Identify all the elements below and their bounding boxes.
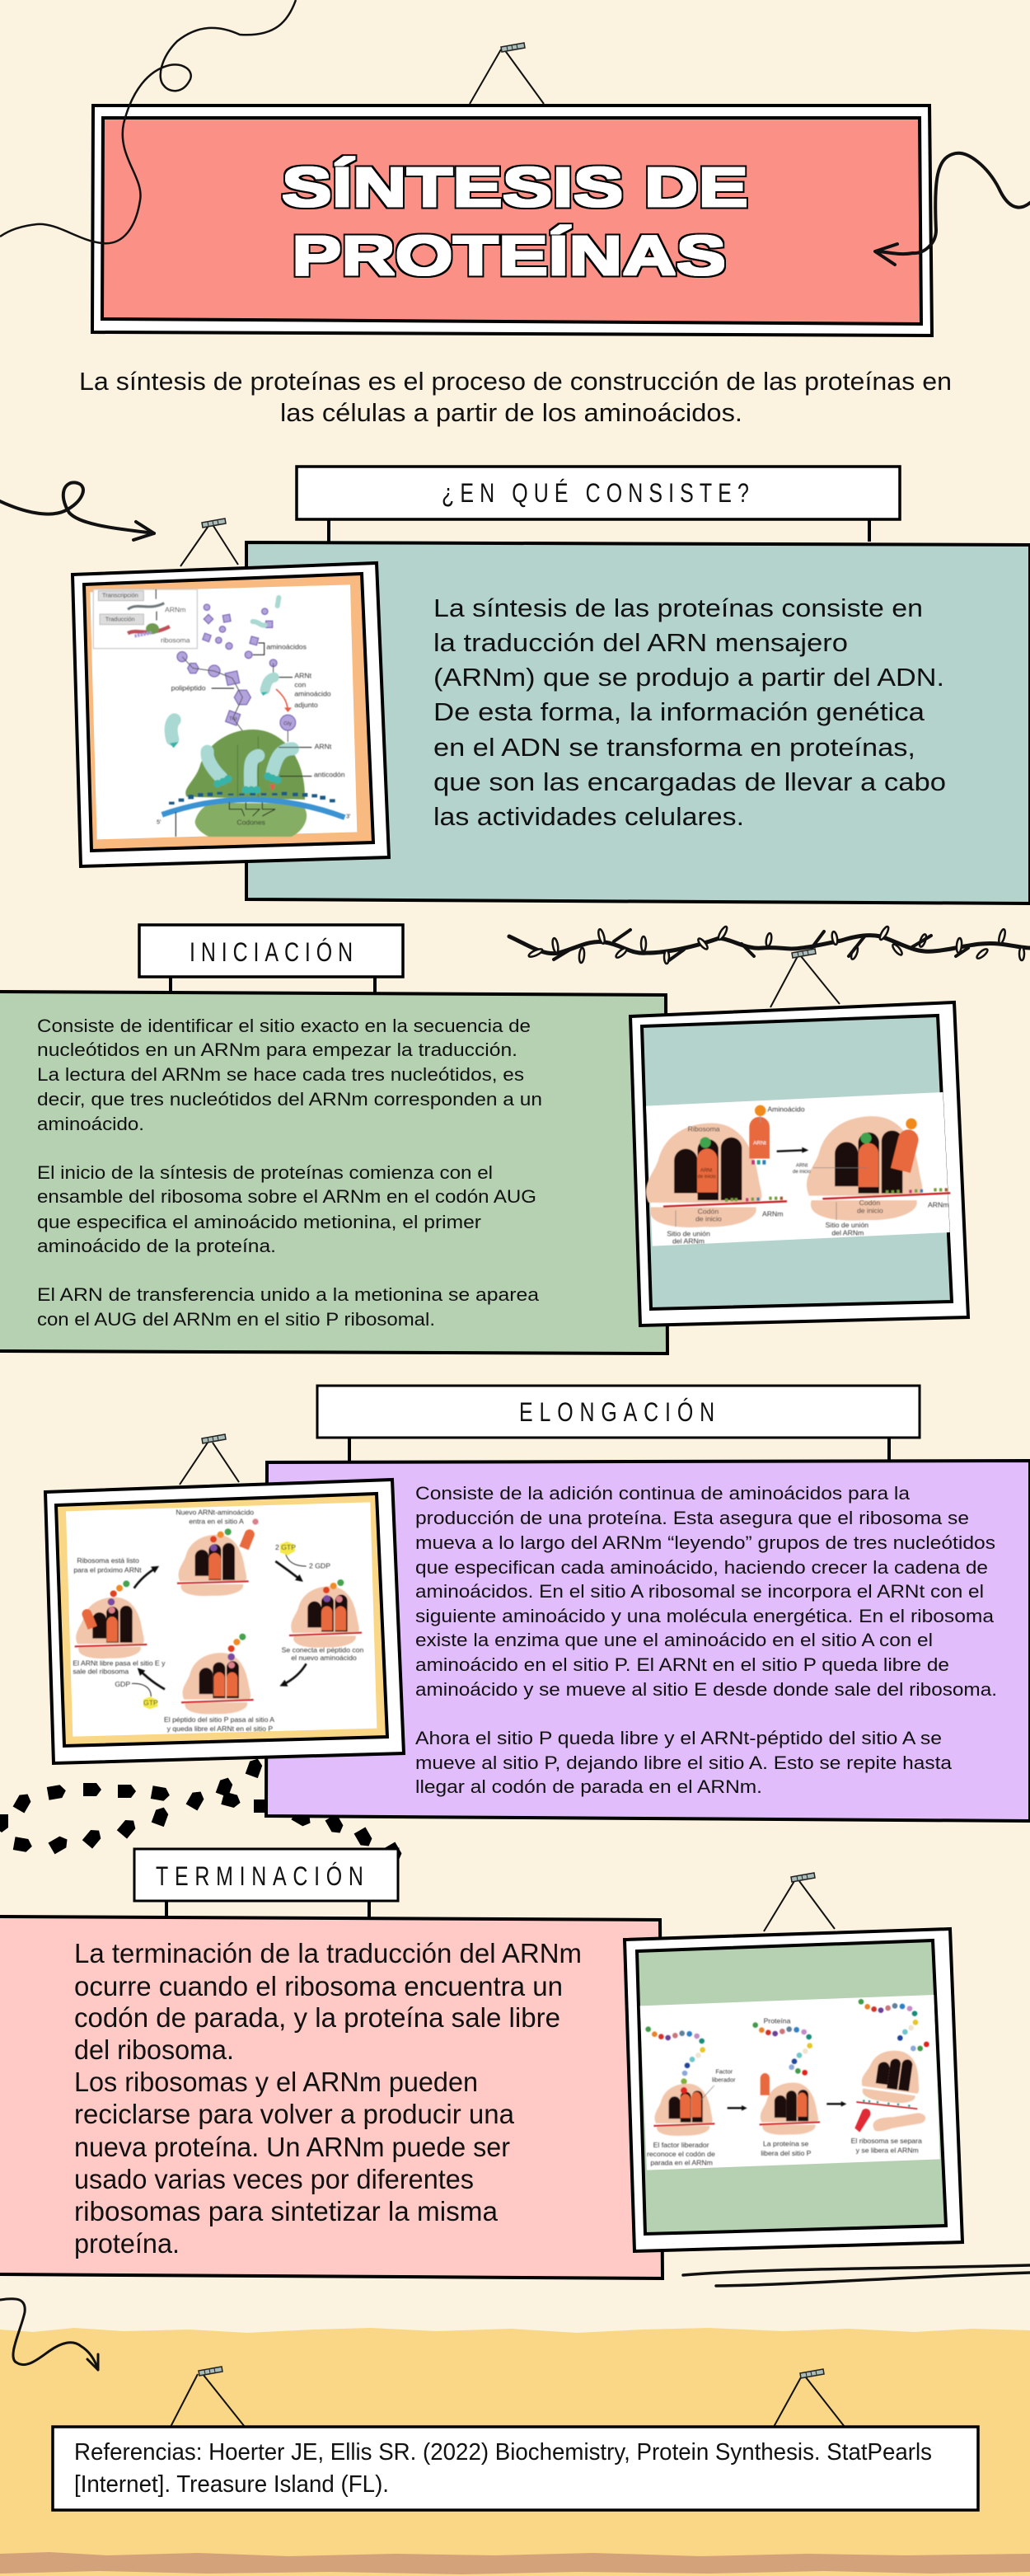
picture: termination diagram <box>625 1929 962 2251</box>
picture: ribosome translation diagram: adjunto <box>294 701 318 709</box>
text block: iniciacion <box>37 1016 542 1330</box>
picture: initiation diagram: ARNm <box>762 1209 783 1218</box>
text block: en que consiste: La síntesis de las proteínas consiste en <box>433 594 923 622</box>
text block: terminacion: reciclarse para volver a producir una <box>74 2099 515 2129</box>
heading: elongacion <box>317 1386 920 1462</box>
text block: elongacion: aminoácido y se mueve al sitio E desde donde sale del ribosoma. <box>415 1679 997 1700</box>
picture: ribosome translation diagram: Transcripción <box>102 591 138 598</box>
title: PROTEÍNAS <box>292 225 726 287</box>
text block: en que consiste: (ARNm) que se produjo a partir del ADN. <box>433 663 944 692</box>
text block: en que consiste: que son las encargadas de llevar a cabo <box>433 767 946 796</box>
text block: elongacion: aminoácido en el sitio P. El ARNt en el sitio P queda libre de <box>415 1654 949 1675</box>
text block: iniciacion: La lectura del ARNm se hace cada tres nucleótidos, es <box>37 1064 524 1085</box>
references box <box>53 2427 978 2510</box>
picture: initiation diagram: ARNm <box>928 1201 948 1209</box>
text block: elongacion: producción de una proteína. Esta asegura que el ribosoma se <box>415 1508 969 1528</box>
picture: termination diagram: liberador <box>712 2076 736 2084</box>
picture: elongation cycle diagram: Nuevo ARNt-aminoácido <box>176 1508 254 1516</box>
text block: terminacion: usado varias veces por diferentes <box>74 2164 474 2194</box>
heading: iniciacion: INICIACIÓN <box>190 937 353 968</box>
decorative squiggle top left <box>0 0 296 243</box>
panel: iniciacion <box>0 992 667 1354</box>
text block: iniciacion: aminoácido de la proteína. <box>37 1236 276 1256</box>
title frame <box>92 106 932 335</box>
intro text: las células a partir de los aminoácidos. <box>280 398 742 427</box>
decorative lines bottom right <box>683 2265 1030 2286</box>
picture: ribosome translation diagram: ARNt <box>315 742 332 750</box>
picture: initiation diagram: Ribosoma <box>688 1125 720 1133</box>
picture: elongation cycle diagram: entra en el sitio A <box>189 1517 244 1525</box>
picture: termination diagram: libera del sitio P <box>761 2149 812 2157</box>
picture: ribosome translation diagram: ribosoma <box>161 636 190 644</box>
picture: termination diagram: El factor liberador <box>653 2141 709 2149</box>
text block: terminacion: del ribosoma. <box>74 2034 234 2065</box>
text block: en que consiste: en el ADN se transforma en proteínas, <box>433 733 915 762</box>
picture: initiation diagram: de inicio <box>698 1175 716 1180</box>
text block: elongacion: existe la enzima que une el aminoácido en el sitio A con el <box>415 1630 933 1650</box>
picture: initiation diagram: de inicio <box>695 1215 722 1223</box>
references box: Referencias: Hoerter JE, Ellis SR. (2022) Biochemistry, Protein Synthesis. StatPearls <box>74 2439 932 2466</box>
panel: terminacion <box>0 1917 662 2278</box>
text block: en que consiste: De esta forma, la información genética <box>433 697 925 726</box>
picture: ribosome translation diagram: con <box>294 680 306 688</box>
picture: initiation diagram: de inicio <box>857 1207 883 1215</box>
heading: terminacion <box>134 1849 398 1919</box>
picture: termination diagram: Factor <box>715 2068 733 2076</box>
picture: elongation cycle diagram: El ARNt libre pasa el sitio E y <box>73 1659 166 1668</box>
title <box>282 157 748 287</box>
text block: terminacion: La terminación de la traducción del ARNm <box>74 1938 582 1968</box>
footer stripe <box>0 2552 1030 2574</box>
picture: elongation cycle diagram: 2 GDP <box>309 1561 330 1570</box>
picture: initiation diagram <box>630 1002 968 1326</box>
picture: ribosome translation diagram: aminoácidos <box>266 642 307 650</box>
text block: terminacion: Los ribosomas y el ARNm pueden <box>74 2067 478 2097</box>
hanger: references nail left <box>171 2367 245 2427</box>
heading: terminacion: TERMINACIÓN <box>156 1861 363 1892</box>
intro text <box>79 367 952 427</box>
heading: en que consiste <box>297 467 900 542</box>
heading: en que consiste: ¿EN QUÉ CONSISTE? <box>442 478 749 509</box>
text block: terminacion: ocurre cuando el ribosoma encuentra un <box>74 1971 563 2001</box>
text block: iniciacion: ensamble del ribosoma sobre el ARNm en el codón AUG <box>37 1186 536 1207</box>
text block: terminacion: ribosomas para sintetizar la misma <box>74 2196 499 2226</box>
text block: iniciacion: El inicio de la síntesis de proteínas comienza con el <box>37 1162 493 1183</box>
picture: ribosome translation diagram: Traducción <box>105 615 135 622</box>
text block: iniciacion: nucleótidos en un ARNm para empezar la traducción. <box>37 1039 517 1060</box>
picture: termination diagram: parada en el ARNm <box>650 2159 713 2167</box>
picture: ribosome translation diagram: Codones <box>236 819 266 827</box>
picture: elongation cycle diagram: el nuevo aminoácido <box>291 1654 357 1662</box>
heading: iniciacion <box>139 925 403 994</box>
picture: termination diagram: y se libera el ARNm <box>856 2147 919 2155</box>
picture: initiation diagram: de inicio <box>793 1170 812 1175</box>
picture: initiation diagram: ARNt <box>796 1164 808 1169</box>
picture: termination diagram: La proteína se <box>763 2139 809 2147</box>
text block: elongacion: Ahora el sitio P queda libre y el ARNt-péptido del sitio A se <box>415 1728 942 1748</box>
picture: initiation diagram: Sitio de unión <box>667 1229 710 1237</box>
picture: initiation diagram: del ARNm <box>831 1229 864 1237</box>
hanger: image 1 nail <box>180 518 238 566</box>
text block: elongacion: Consiste de la adición continua de aminoácidos para la <box>415 1483 911 1504</box>
picture: ribosome translation diagram: polipéptido <box>171 684 206 692</box>
text block: elongacion: llegar al codón de parada en el ARNm. <box>415 1776 762 1797</box>
text block: terminacion <box>74 1938 582 2259</box>
references box: [Internet]. Treasure Island (FL). <box>74 2471 389 2498</box>
arrow: squiggle into title <box>875 153 1030 265</box>
text block: terminacion: nueva proteína. Un ARNm puede ser <box>74 2132 510 2162</box>
picture: elongation cycle diagram: GDP <box>115 1680 130 1688</box>
picture: initiation diagram: Codón <box>859 1199 880 1207</box>
text block: elongacion: siguiente aminoácido y una molécula energética. En el ribosoma <box>415 1606 995 1626</box>
picture: ribosome translation diagram: Gly <box>283 720 293 726</box>
panel: elongacion <box>266 1461 1030 1821</box>
picture: elongation cycle diagram: 2 GTP <box>275 1543 296 1551</box>
text block: elongacion: que especifican cada aminoácido, haciendo crecer la cadena de <box>415 1557 988 1578</box>
text block: elongacion: aminoácidos. En el sitio A ribosomal se incorpora el ARNt con el <box>415 1581 984 1602</box>
arrow: squiggle to references <box>0 2299 98 2370</box>
picture: elongation cycle diagram: sale del ribosoma <box>73 1668 129 1676</box>
picture: elongation cycle diagram: Ribosoma está listo <box>77 1556 139 1565</box>
picture: elongation cycle diagram: Se conecta el péptido con <box>282 1645 363 1654</box>
decorative dashed trail <box>0 1757 404 1865</box>
hanger: image 4 nail <box>764 1873 835 1931</box>
hanger: image 2 nail <box>770 949 840 1007</box>
picture: initiation diagram: del ARNm <box>672 1236 705 1245</box>
text block: iniciacion: decir, que tres nucleótidos del ARNm corresponden a un <box>37 1089 542 1110</box>
picture: ribosome translation diagram: aminoácido <box>294 690 331 698</box>
picture: initiation diagram: Sitio de unión <box>826 1221 868 1229</box>
arrow: loop to section 1 <box>0 482 154 540</box>
picture: ribosome translation diagram: ARNt <box>294 671 312 679</box>
text block: en que consiste: las actividades celulares. <box>433 802 744 831</box>
picture: ribosome translation diagram <box>73 563 389 866</box>
picture: initiation diagram: ARNt <box>753 1140 766 1146</box>
picture: termination diagram: reconoce el codón de <box>647 2150 715 2158</box>
text block: iniciacion: El ARN de transferencia unido a la metionina se aparea <box>37 1284 540 1305</box>
picture: initiation diagram: Aminoácido <box>767 1105 805 1113</box>
footer band <box>0 2328 1030 2576</box>
heading: elongacion: ELONGACIÓN <box>519 1397 714 1428</box>
picture: initiation diagram: ARNt <box>700 1169 713 1174</box>
picture: termination diagram: Proteína <box>764 2016 791 2025</box>
picture: elongation cycle diagram: GTP <box>143 1698 158 1706</box>
picture: elongation cycle diagram: y queda libre el ARNt en el sitio P <box>167 1724 273 1733</box>
hanger: references nail right <box>774 2369 845 2427</box>
text block: elongacion: mueve al sitio P, dejando libre el sitio A. Esto se repite hasta <box>415 1753 953 1773</box>
hanger: image 3 nail <box>180 1434 239 1485</box>
picture: ribosome translation diagram: 3' <box>346 813 351 820</box>
decorative vine <box>509 926 1030 964</box>
text block: en que consiste: la traducción del ARN mensajero <box>433 628 848 657</box>
title panel <box>102 118 921 324</box>
text block: elongacion: mueva a lo largo del ARNm “leyendo” grupos de tres nucleótidos <box>415 1532 995 1553</box>
picture: initiation diagram: Codón <box>698 1208 719 1216</box>
text block: iniciacion: que especifica el aminoácido metionina, el primer <box>37 1212 481 1232</box>
intro text: La síntesis de proteínas es el proceso de construcción de las proteínas en <box>79 367 952 396</box>
panel: en que consiste <box>246 542 1030 903</box>
picture: ribosome translation diagram: Trp <box>229 716 237 722</box>
title: SÍNTESIS DE <box>282 157 748 218</box>
picture: ribosome translation diagram: anticodón <box>314 770 345 778</box>
text block: iniciacion: aminoácido. <box>37 1114 144 1134</box>
picture: elongation cycle diagram <box>45 1480 404 1763</box>
picture: elongation cycle diagram: El péptido del sitio P pasa al sitio A <box>164 1715 274 1724</box>
text block: iniciacion: con el AUG del ARNm en el sitio P ribosomal. <box>37 1309 435 1330</box>
picture: ribosome translation diagram: ARNm <box>165 606 185 614</box>
text block: iniciacion: Consiste de identificar el sitio exacto en la secuencia de <box>37 1016 531 1036</box>
picture: termination diagram: El ribosoma se separa <box>851 2137 922 2145</box>
text block: elongacion <box>415 1483 997 1797</box>
picture: ribosome translation diagram: 5' <box>157 818 162 825</box>
text block: en que consiste <box>433 594 946 831</box>
text block: terminacion: codón de parada, y la proteína sale libre <box>74 2002 560 2033</box>
picture: ribosome translation diagram: Phe <box>242 735 252 741</box>
picture: elongation cycle diagram: para el próximo ARNt <box>73 1565 142 1574</box>
text block: terminacion: proteína. <box>74 2228 180 2259</box>
hanger: title nail <box>470 43 544 104</box>
